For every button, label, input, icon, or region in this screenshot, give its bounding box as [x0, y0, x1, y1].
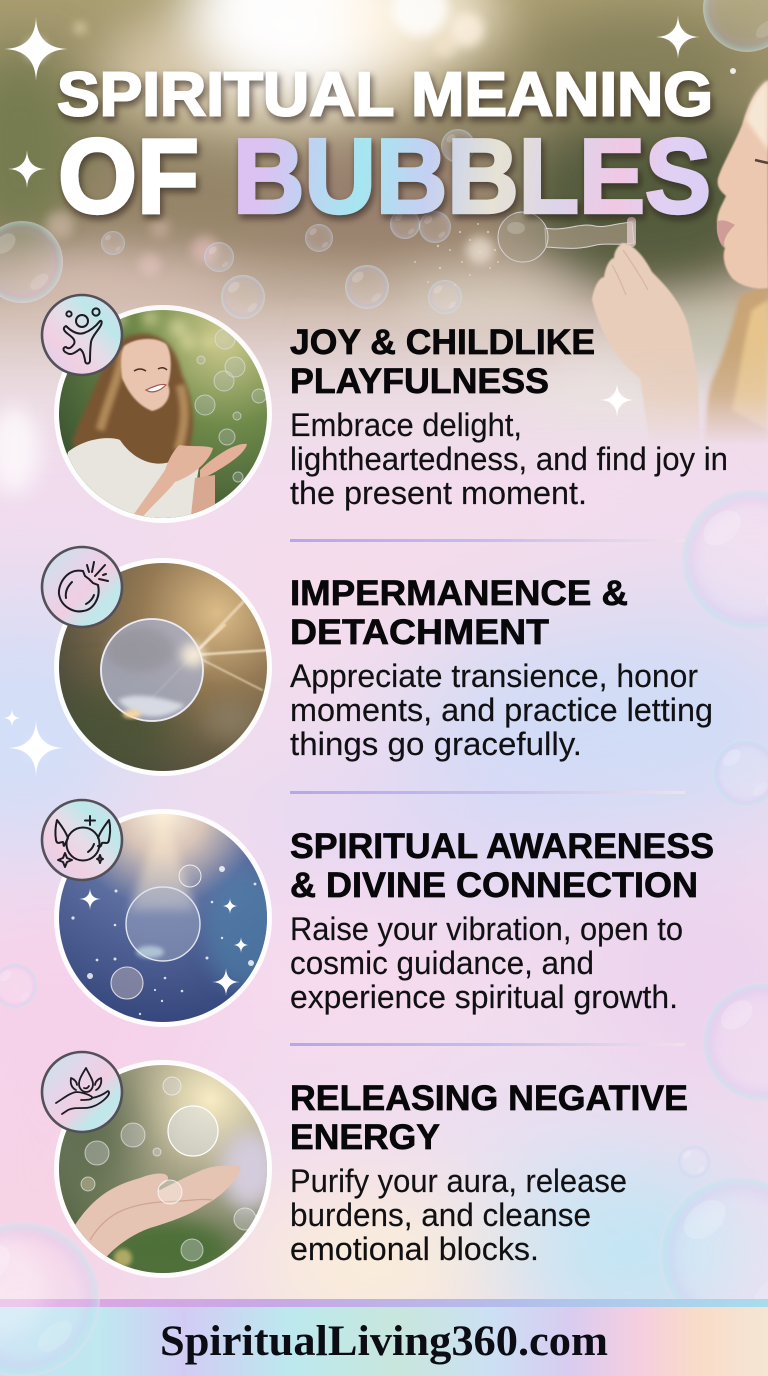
footer band [0, 1299, 768, 1376]
text block: experience spiritual growth. [290, 979, 678, 1015]
heading [290, 323, 595, 401]
heading [290, 827, 714, 905]
heading: JOY & CHILDLIKE [290, 323, 595, 362]
icon: popping bubble [42, 547, 122, 627]
heading: & DIVINE CONNECTION [290, 866, 698, 905]
icon: hand with water drop [42, 1052, 122, 1132]
text block: the present moment. [290, 475, 587, 511]
text block: Embrace delight, [290, 407, 522, 443]
title: OF [58, 116, 199, 235]
photo: bursting bubble [40, 558, 272, 776]
panel: impermanence and detachment [40, 547, 713, 776]
text block: Raise your vibration, open to [290, 911, 683, 947]
hand [592, 243, 700, 445]
heading: RELEASING NEGATIVE [290, 1079, 688, 1118]
heading: DETACHMENT [290, 613, 549, 652]
icon: winged bubble [42, 800, 122, 880]
panel: spiritual awareness and divine connection [42, 800, 714, 1027]
heading [290, 574, 628, 652]
heading: ENERGY [290, 1118, 440, 1157]
photo: cosmic bubbles [54, 809, 285, 1027]
text block: cosmic guidance, and [290, 945, 594, 981]
text block: Appreciate transience, honor [290, 658, 698, 694]
photo: woman catching bubbles [54, 305, 272, 525]
title [57, 60, 713, 235]
hair and shoulder [704, 285, 768, 445]
text block: emotional blocks. [290, 1231, 539, 1267]
text block: Purify your aura, release [290, 1163, 627, 1199]
foreground bubbles [0, 1176, 768, 1376]
heading [290, 1079, 688, 1157]
heading: SPIRITUAL AWARENESS [290, 827, 714, 866]
heading: IMPERMANENCE & [290, 574, 628, 613]
photo: open hands with bubbles [50, 1060, 280, 1280]
text block: things go gracefully. [290, 726, 582, 762]
sparkles [0, 15, 736, 776]
text block: moments, and practice letting [290, 692, 713, 728]
photo backdrop: sunlit garden [0, 0, 768, 430]
wand and bubble being blown [414, 212, 636, 286]
heading: PLAYFULNESS [290, 362, 549, 401]
text block: lightheartedness, and find joy in [290, 441, 728, 477]
title: SPIRITUAL MEANING [57, 60, 713, 130]
title: BUBBLES [233, 116, 711, 235]
text block: burdens, and cleanse [290, 1197, 591, 1233]
icon: joyful figure [42, 295, 122, 375]
text block [290, 911, 683, 1015]
text block [290, 407, 728, 511]
face profile [717, 80, 768, 289]
text block [290, 1163, 627, 1267]
website url: SpiritualLiving360.com [160, 1318, 608, 1365]
panel: releasing negative energy [42, 1052, 688, 1280]
text block [290, 658, 713, 762]
woman blowing bubbles [592, 80, 768, 445]
panel: joy and childlike playfulness [42, 295, 728, 525]
